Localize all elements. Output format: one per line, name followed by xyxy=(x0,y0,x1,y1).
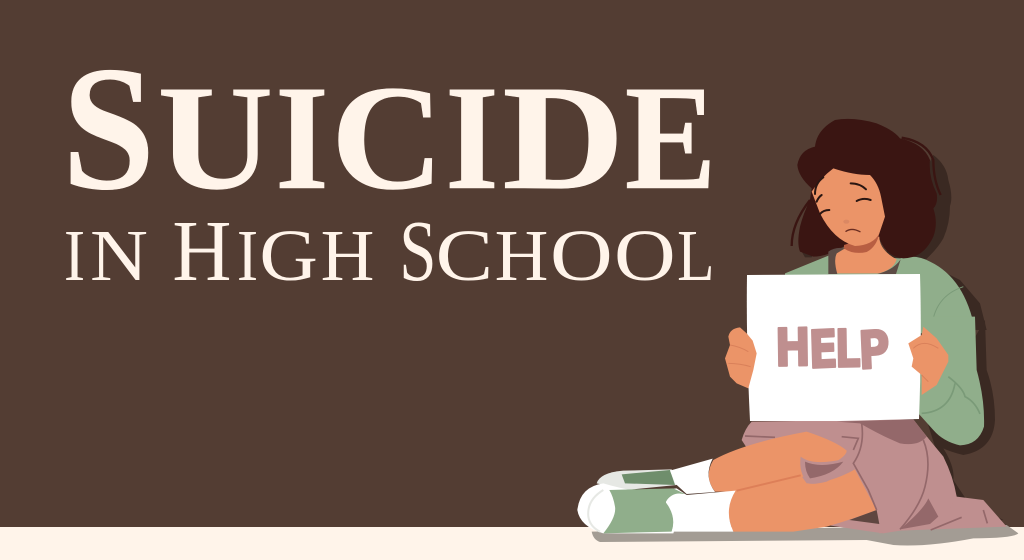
hair strands xyxy=(792,138,941,246)
title: Suicide: S xyxy=(62,30,155,227)
sign text: HELP: E xyxy=(808,320,839,381)
sleeve folds xyxy=(922,377,980,414)
right hand xyxy=(908,327,948,395)
upper thigh xyxy=(709,432,847,492)
sign text: HELP: H xyxy=(774,318,811,379)
title: Suicide: E xyxy=(625,55,716,221)
sign text: HELP: P xyxy=(857,320,891,382)
wall shadow xyxy=(802,155,1003,527)
neck xyxy=(835,237,897,273)
subtitle: in High School: G xyxy=(259,215,318,296)
face features xyxy=(815,177,871,232)
floor shadow xyxy=(592,525,1018,545)
subtitle: in High School xyxy=(64,203,715,300)
subtitle: in High School: L xyxy=(677,215,715,296)
skirt folds xyxy=(745,423,987,530)
title: Suicide: C xyxy=(331,56,444,221)
help sign xyxy=(747,274,921,421)
skirt overlap xyxy=(855,427,957,533)
sign text: HELP: L xyxy=(834,318,861,379)
title: Suicide: U xyxy=(157,55,273,221)
subtitle: in High School: I xyxy=(237,215,258,296)
hair xyxy=(797,119,937,258)
title: Suicide: I xyxy=(445,55,499,221)
collar xyxy=(828,248,901,274)
floor band xyxy=(0,527,1024,560)
face xyxy=(812,168,885,246)
title: Suicide xyxy=(62,30,716,227)
subtitle: in High School: S xyxy=(399,203,436,299)
leg crease xyxy=(737,475,801,491)
illustration: sad girl holding help sign xyxy=(577,119,1018,545)
skirt shading xyxy=(837,419,938,529)
subtitle: in High School: O xyxy=(550,216,613,296)
back sock xyxy=(670,459,715,494)
subtitle: in High School: N xyxy=(90,215,148,296)
subtitle: in High School: O xyxy=(614,216,676,297)
sleeve xyxy=(918,317,984,445)
back shoe xyxy=(597,469,677,490)
title: Suicide: D xyxy=(502,55,624,221)
front shoe xyxy=(577,483,687,533)
shadow under skirt xyxy=(849,510,879,524)
left hand xyxy=(725,327,757,388)
sign text: HELP xyxy=(774,318,891,382)
front sock xyxy=(666,491,736,532)
neck shadow xyxy=(844,233,879,253)
skirt hem pocket xyxy=(800,457,849,484)
subtitle: in High School: H xyxy=(172,204,231,300)
subtitle: in High School: I xyxy=(64,215,85,296)
subtitle: in High School: C xyxy=(436,216,493,296)
title: Suicide: I xyxy=(275,55,329,221)
lower leg xyxy=(728,469,877,532)
sleeve seam xyxy=(932,287,963,330)
sweater torso xyxy=(785,255,975,333)
subtitle: in High School: H xyxy=(495,215,548,296)
subtitle: in High School: H xyxy=(321,215,374,296)
skirt xyxy=(742,419,1007,533)
hand creases xyxy=(728,343,938,382)
